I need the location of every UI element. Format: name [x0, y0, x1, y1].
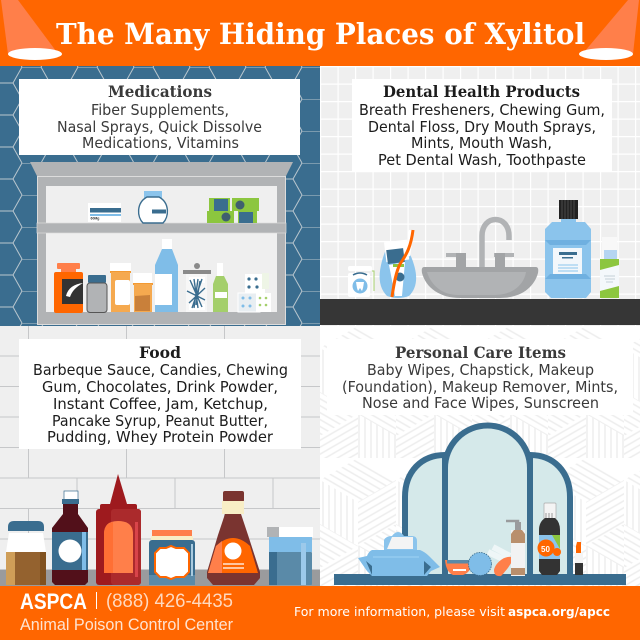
jam jar — [149, 530, 195, 585]
right spotlight — [579, 0, 639, 60]
sink and faucet — [422, 220, 538, 298]
ASPCA logo and phone: (888) 426-4435 — [106, 590, 233, 612]
website note: For more information, please visit — [294, 604, 505, 619]
three-panel vanity mirror — [405, 426, 570, 577]
ketchup bottle — [96, 474, 141, 585]
peanut butter jar — [6, 521, 46, 585]
food text box: Barbeque Sauce, Candies, Chewing — [33, 361, 288, 379]
dental floss — [348, 266, 374, 297]
ASPCA logo and phone — [20, 589, 233, 634]
website note — [294, 604, 610, 619]
baby wipes package — [358, 532, 440, 576]
mints bowl — [445, 560, 472, 575]
barbeque sauce bottle — [52, 491, 88, 585]
panel: dental health products — [320, 66, 640, 326]
personal care text box: Baby Wipes, Chapstick, Makeup — [367, 361, 594, 379]
website note: aspca.org/apcc — [508, 604, 610, 619]
personal care text box: (Foundation), Makeup Remover, Mints, — [342, 378, 618, 396]
top shelf items — [88, 191, 259, 223]
dental text box: Dental Health Products — [383, 82, 580, 101]
dry mouth spray — [600, 237, 619, 298]
medications text box — [19, 79, 300, 155]
sunscreen bottle: 50 — [541, 545, 550, 554]
food text box: Gum, Chocolates, Drink Powder, — [42, 378, 278, 396]
food text box: Pancake Syrup, Peanut Butter, — [52, 412, 268, 430]
medications text box: Medications, Vitamins — [82, 134, 239, 152]
personal care text box: Nose and Face Wipes, Sunscreen — [362, 394, 599, 412]
personal care text box — [327, 339, 633, 415]
dental text box: Breath Fresheners, Chewing Gum, — [359, 101, 605, 119]
dental text box — [352, 79, 612, 171]
pancake syrup bottle — [207, 491, 260, 585]
sunscreen bottle — [538, 503, 561, 575]
medications text box: Nasal Sprays, Quick Dissolve — [57, 118, 262, 136]
left spotlight — [1, 0, 62, 60]
title: The Many Hiding Places of Xylitol — [56, 17, 585, 51]
panel: food — [0, 326, 320, 586]
dental text box: Mints, Mouth Wash, — [411, 134, 552, 152]
ASPCA logo and phone: ASPCA — [20, 589, 87, 614]
cup with toothpaste and toothbrush — [380, 230, 416, 298]
food text box: Food — [139, 343, 181, 362]
medicine cabinet — [30, 162, 293, 324]
medications text box: Medications — [108, 82, 212, 101]
vanity shelf — [334, 574, 626, 585]
food counter — [0, 570, 320, 586]
makeup sponge and powder puff — [468, 547, 512, 576]
food text box: Instant Coffee, Jam, Ketchup, — [53, 395, 268, 413]
counter — [320, 299, 640, 325]
food text box: Pudding, Whey Protein Powder — [47, 428, 274, 446]
panel: medications — [0, 66, 320, 326]
food text box — [19, 339, 301, 449]
ASPCA logo and phone: Animal Poison Control Center — [20, 615, 233, 634]
header banner — [0, 0, 640, 66]
dental text box: Dental Floss, Dry Mouth Sprays, — [368, 118, 596, 136]
lipstick — [575, 542, 583, 575]
mouthwash bottle — [545, 200, 591, 298]
whey protein tub — [267, 527, 313, 585]
bottom shelf items — [54, 239, 271, 313]
medications text box: Fiber Supplements, — [91, 101, 229, 119]
pump bottle — [506, 521, 525, 576]
panel: personal care items — [320, 326, 640, 586]
footer — [0, 586, 640, 640]
dental text box: Pet Dental Wash, Toothpaste — [378, 151, 586, 169]
top shelf items: 60Mg — [90, 216, 99, 220]
personal care text box: Personal Care Items — [395, 343, 566, 362]
